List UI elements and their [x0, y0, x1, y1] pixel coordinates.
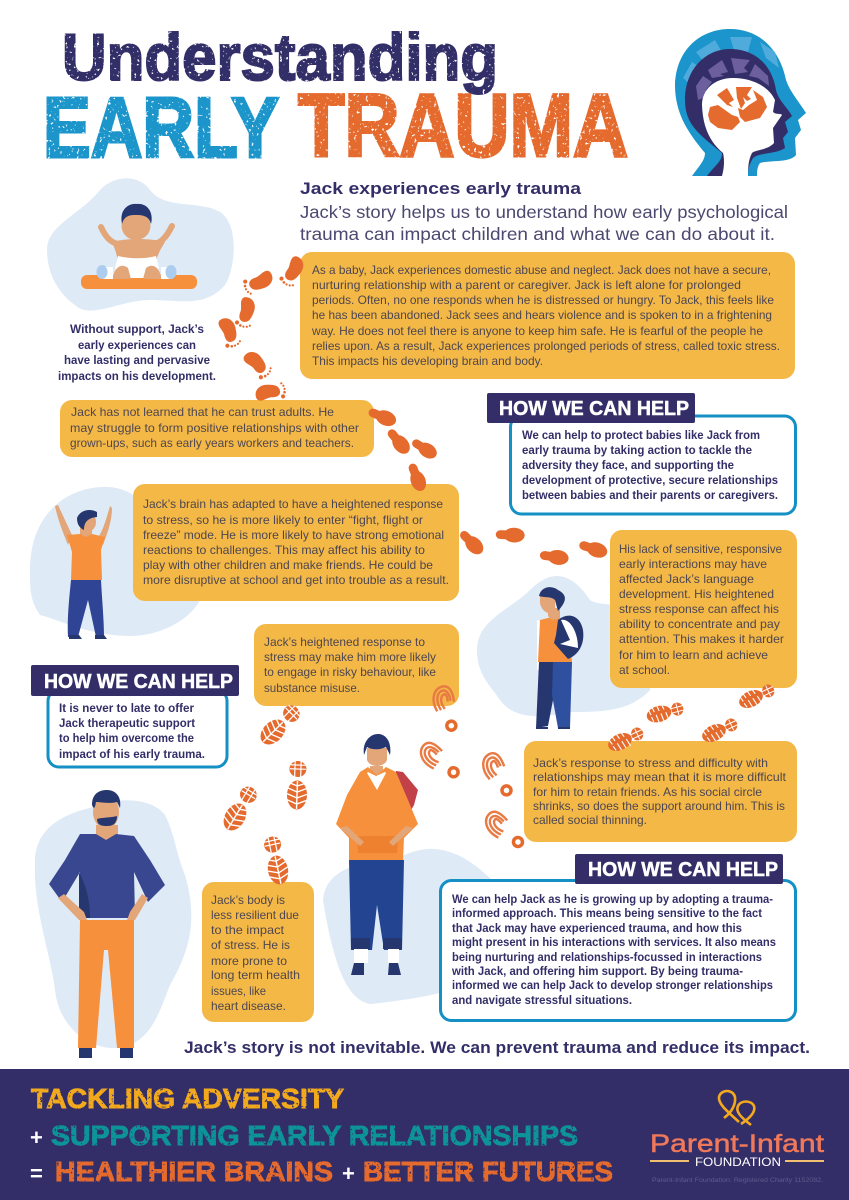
panel: body resilience: heart disease.: [211, 1000, 286, 1013]
tag: how we can help: HOW WE CAN HELP: [44, 671, 233, 693]
intro text: Jack’s story helps us to understand how early psychological: [300, 202, 788, 222]
heading word: TRAUMA: TRAUMA: [298, 75, 628, 175]
intro text: [300, 202, 788, 244]
panel: how we can help 1: early trauma by taking action to tackle the: [522, 444, 753, 457]
panel: how we can help 2: Jack therapeutic support: [59, 717, 195, 730]
blob and baby illustration: [47, 178, 234, 311]
panel: language development: early interactions may have: [619, 558, 767, 571]
footer line: tackling adversity: TACKLING ADVERSITY: [31, 1083, 344, 1114]
panel: heightened response: more disruptive at school and get into trouble as a result.: [143, 574, 449, 587]
panel: risky behaviour: stress may make him more likely: [264, 651, 436, 664]
panel: language development: His lack of sensitive, responsive: [619, 543, 782, 556]
title: Understanding Early Trauma: [43, 20, 628, 176]
panel: body resilience: Jack’s body is: [211, 894, 285, 907]
panel: trust: may struggle to form positive relationships with other: [70, 422, 359, 435]
baby caption: impacts on his development.: [58, 369, 216, 383]
panel: language development: at school.: [619, 664, 670, 677]
panel: heightened response: [133, 484, 459, 601]
footprints: bare feet: [215, 254, 307, 403]
boy with raised arms: [55, 505, 112, 639]
panel: how we can help 3: informed approach. This means being sensitive to the fact: [452, 907, 762, 920]
footprints: shoes: [366, 404, 609, 566]
panel: baby story: periods. Often, no one responds when he is distressed or hungry. To Jack, this feels like: [312, 294, 774, 307]
teenager in hoodie: [336, 734, 418, 975]
tag: how we can help: [31, 665, 239, 696]
baby caption: Without support, Jack’s: [70, 322, 204, 336]
heading word: Understanding: Understanding: [62, 20, 498, 94]
tag: how we can help: HOW WE CAN HELP: [588, 859, 778, 881]
footer line: healthier brains and better futures: [30, 1156, 613, 1187]
panel: heightened response: Jack’s brain has adapted to have a heightened response: [143, 498, 443, 511]
blob behind teen: [323, 849, 520, 1004]
blob behind man: [35, 800, 191, 1048]
logo: Parent-Infant Foundation: Parent-Infant: [650, 1130, 824, 1158]
panel: social thinning: relationships may mean that it is more difficult: [533, 771, 787, 784]
footprints: boots: [219, 701, 308, 886]
panel: how we can help 3: [440, 854, 796, 1020]
panel: heightened response: to stress, so he is more likely to enter “fight, flight or: [143, 514, 423, 527]
panel: how we can help 3: might present in his interactions with services. It also means: [452, 936, 776, 949]
panel: baby story: nurturing relationship with a parent or caregiver. Jack is left alone for prolonged: [312, 279, 741, 292]
panel: how we can help 1: [487, 393, 796, 514]
tag: how we can help: HOW WE CAN HELP: [499, 398, 689, 420]
panel: how we can help 1: development of protective, secure relationships: [522, 474, 778, 487]
panel: body resilience: less resilient due: [211, 909, 299, 922]
man with hands on hips: [49, 790, 165, 1058]
panel: how we can help 3: We can help Jack as he is growing up by adopting a trauma-: [452, 893, 773, 906]
panel: language development: [610, 530, 797, 688]
panel: language development: affected Jack’s language: [619, 573, 754, 586]
panel: baby story: As a baby, Jack experiences domestic abuse and neglect. Jack does not have a secure,: [312, 264, 771, 277]
panel: social thinning: Jack’s response to stress and difficulty with: [533, 757, 768, 770]
panel: baby story: [300, 252, 795, 379]
panel: risky behaviour: Jack’s heightened response to: [264, 636, 425, 649]
panel: language development: for him to learn and achieve: [619, 649, 768, 662]
panel: language development: development. His heightened: [619, 588, 774, 601]
panel: how we can help 3: and navigate stressful situations.: [452, 994, 632, 1007]
panel: social thinning: called social thinning.: [533, 814, 647, 827]
panel: body resilience: to the impact: [211, 924, 285, 937]
logo: Parent-Infant Foundation: FOUNDATION: [695, 1155, 781, 1169]
schoolboy with backpack: [536, 587, 583, 729]
panel: trust: [60, 400, 374, 457]
panel: how we can help 1: adversity they face, and supporting the: [522, 459, 735, 472]
panel: heightened response: play with other children and make friends. He could be: [143, 559, 433, 572]
panel: baby story: he has been abandoned. Jack sees and hears violence and is spoken to in a frightening: [312, 309, 772, 322]
panel: how we can help 3: being nurturing and relationships-focussed in interactions: [452, 951, 762, 964]
panel: heightened response: reactions to challenges. This may affect his ability to: [143, 544, 425, 557]
icon: head profile with fractured brain: [675, 29, 806, 176]
tag: how we can help: [487, 393, 695, 423]
logo: Parent-Infant Foundation: [650, 1091, 824, 1184]
panel: baby story: way. He does not feel there is anyone to keep him safe. He is fearful of the people he: [311, 325, 763, 338]
intro heading: Jack experiences early trauma: [300, 179, 582, 198]
panel: language development: stress response can affect his: [619, 603, 779, 616]
panel: trust: grown-ups, such as early years workers and teachers.: [70, 437, 354, 450]
blob behind schoolboy: [477, 576, 650, 716]
panel: social thinning: shrinks, so does the support around him. This is: [533, 800, 785, 813]
panel: social thinning: for him to retain friends. As his social circle: [533, 786, 762, 799]
panel: language development: attention. This makes it harder: [619, 633, 784, 646]
panel: risky behaviour: to engage in risky behaviour, like: [264, 666, 436, 679]
panel: heightened response: freeze” mode. He is more likely to have strong emotional: [143, 529, 444, 542]
panel: how we can help 3: with Jack, and offering him support. By being trauma-: [451, 965, 743, 978]
blob behind raised-arms boy: [30, 487, 200, 636]
footprints: tread: [605, 681, 777, 755]
panel: how we can help 3: informed we can help Jack to develop stronger relationships: [452, 979, 773, 992]
panel: how we can help 1: We can help to protect babies like Jack from: [522, 429, 760, 442]
panel: how we can help 2: [31, 665, 239, 767]
panel: risky behaviour: [254, 624, 459, 706]
panel: body resilience: more prone to: [211, 955, 287, 968]
logo: Parent-Infant Foundation: Parent-Infant Foundation: Registered Charity 1152082.: [652, 1177, 823, 1184]
panel: how we can help 2: to help him overcome the: [59, 732, 195, 745]
footer line: healthier brains and better futures: =: [30, 1161, 43, 1186]
footer line: healthier brains and better futures: BETTER FUTURES: [363, 1156, 613, 1187]
panel: social thinning: [524, 741, 797, 842]
panel: baby story: This impacts his developing brain and body.: [312, 355, 543, 368]
panel: language development: ability to concentrate and pay: [619, 618, 780, 631]
baby caption: early experiences can: [78, 338, 196, 352]
footer line: healthier brains and better futures: HEALTHIER BRAINS: [55, 1156, 333, 1187]
closing statement: Jack’s story is not inevitable. We can prevent trauma and reduce its impact.: [184, 1039, 810, 1057]
intro text: trauma can impact children and what we can do about it.: [300, 224, 775, 244]
footer line: supporting early relationships: SUPPORTING EARLY RELATIONSHIPS: [51, 1120, 578, 1151]
panel: body resilience: [202, 882, 314, 1022]
panel: how we can help 3: that Jack may have experienced trauma, and how this: [452, 922, 742, 935]
heading word: EARLY: EARLY: [43, 81, 279, 176]
footer line: supporting early relationships: +: [30, 1125, 43, 1150]
panel: trust: Jack has not learned that he can trust adults. He: [71, 406, 334, 419]
panel: body resilience: of stress. He is: [211, 939, 290, 952]
panel: body resilience: long term health: [211, 969, 300, 982]
panel: baby story: relies upon. As a result, Jack experiences prolonged periods of stress, called toxic stress.: [312, 340, 780, 353]
panel: how we can help 1: between babies and their parents or caregivers.: [522, 489, 778, 502]
panel: how we can help 2: impact of his early trauma.: [59, 748, 205, 761]
baby caption: [58, 322, 216, 383]
panel: how we can help 2: It is never to late to offer: [59, 702, 194, 715]
footer line: healthier brains and better futures: +: [342, 1161, 355, 1186]
panel: body resilience: issues, like: [211, 985, 266, 998]
panel: risky behaviour: substance misuse.: [264, 682, 360, 695]
footprints: arcs: [416, 684, 528, 852]
tag: how we can help: [575, 854, 783, 884]
baby caption: have lasting and pervasive: [64, 353, 210, 367]
footer band: [0, 1069, 849, 1200]
